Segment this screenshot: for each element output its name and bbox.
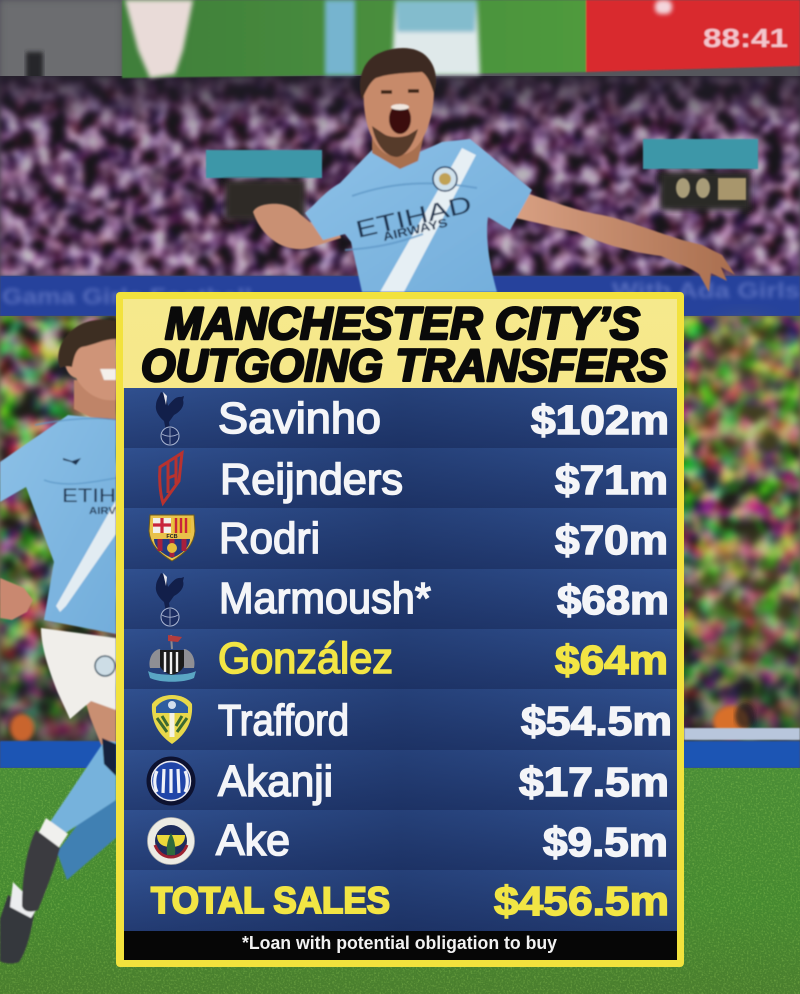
neck and head xyxy=(74,380,116,419)
title line 1: MANCHESTER CITY’S xyxy=(165,298,640,349)
big screen: 88:41 xyxy=(703,23,788,53)
sock tape xyxy=(36,818,68,852)
table rows xyxy=(124,388,677,931)
row: Marmoush: $68m xyxy=(557,577,669,623)
icon: Leeds crest xyxy=(152,695,192,744)
panel frame xyxy=(116,292,684,967)
neck xyxy=(372,135,424,169)
row: total sales: $456.5m xyxy=(494,878,669,924)
row: González (highlighted) xyxy=(148,634,668,683)
shirt xyxy=(0,415,116,634)
left arm and fist xyxy=(253,204,341,249)
row: Savinho: $102m xyxy=(531,397,669,443)
row: Savinho: Savinho xyxy=(218,394,381,443)
right arm and hand xyxy=(507,193,735,292)
row: total sales xyxy=(151,878,669,924)
row: Savinho xyxy=(156,392,669,445)
rear boot xyxy=(0,895,35,964)
eyes xyxy=(381,91,419,92)
title line 2: OUTGOING TRANSFERS xyxy=(141,340,667,391)
row: Trafford: $54.5m xyxy=(521,698,672,744)
front boot xyxy=(22,830,60,912)
row: Ake: $9.5m xyxy=(543,819,668,865)
row: Rodri: $70m xyxy=(555,517,668,563)
concourse signs xyxy=(206,139,758,220)
hair xyxy=(360,48,436,100)
player: main celebrating xyxy=(253,48,735,292)
sponsor text: ETIHAD xyxy=(353,191,474,244)
smile xyxy=(100,369,116,380)
footnote bar xyxy=(124,931,677,960)
sponsor: ETIH xyxy=(62,486,116,507)
icon: Inter crest xyxy=(146,756,196,806)
upper concourse xyxy=(0,0,800,90)
shirt sash xyxy=(380,148,476,292)
row: Trafford: Trafford xyxy=(218,696,349,745)
rear leg xyxy=(57,800,118,880)
icon: Barcelona crest: FCB xyxy=(166,534,178,540)
player: left running xyxy=(0,320,118,964)
head xyxy=(364,58,434,156)
row: total sales: TOTAL SALES xyxy=(151,880,390,921)
footnote bar: *Loan with potential obligation to buy xyxy=(242,933,557,953)
pitch xyxy=(0,768,800,994)
player: main celebrating: AIRWAYS xyxy=(382,215,449,244)
row: Akanji: $17.5m xyxy=(519,759,669,805)
shirt badge xyxy=(433,167,457,191)
icon: Barcelona crest xyxy=(149,515,195,561)
row: Rodri: Rodri xyxy=(219,514,320,563)
row: Marmoush: Marmoush* xyxy=(219,574,431,623)
open mouth xyxy=(389,104,411,134)
row: Reijnders xyxy=(160,453,668,504)
big screen xyxy=(122,0,800,78)
row: Rodri xyxy=(149,514,668,563)
front sock xyxy=(50,740,116,834)
title band xyxy=(123,298,677,391)
icon: AC Milan crest xyxy=(160,453,182,503)
blue pitchside board xyxy=(0,741,800,768)
icon: Tottenham crest xyxy=(156,573,184,626)
row: Reijnders: $71m xyxy=(555,457,668,503)
row: Ake xyxy=(148,816,668,865)
thigh xyxy=(82,685,116,747)
row: Reijnders: Reijnders xyxy=(220,455,403,504)
panel: transfers table xyxy=(116,292,684,967)
row: Ake: Ake xyxy=(216,816,290,865)
hair xyxy=(58,320,116,368)
icon: Fenerbahce crest xyxy=(148,818,194,864)
beard xyxy=(372,126,418,157)
stadium background: Gama Girls Football xyxy=(2,284,252,309)
stadium background: With Ada Girls xyxy=(612,278,800,303)
lower crowd xyxy=(0,316,800,742)
row: Akanji: Akanji xyxy=(218,757,333,806)
fist xyxy=(0,578,33,620)
player: left running: AIRV xyxy=(89,506,116,517)
shirt xyxy=(305,139,532,292)
advertising board upper xyxy=(0,276,800,316)
row: González (highlighted): $64m xyxy=(555,637,668,683)
shorts xyxy=(41,628,116,719)
row: González (highlighted): González xyxy=(218,634,393,683)
row: Akanji xyxy=(146,756,669,806)
icon: Newcastle crest xyxy=(148,635,196,682)
row: Trafford xyxy=(152,695,672,745)
row: Marmoush xyxy=(156,573,669,626)
upper crowd xyxy=(0,76,800,276)
icon: Tottenham crest xyxy=(156,392,184,445)
white board trim xyxy=(684,728,800,740)
